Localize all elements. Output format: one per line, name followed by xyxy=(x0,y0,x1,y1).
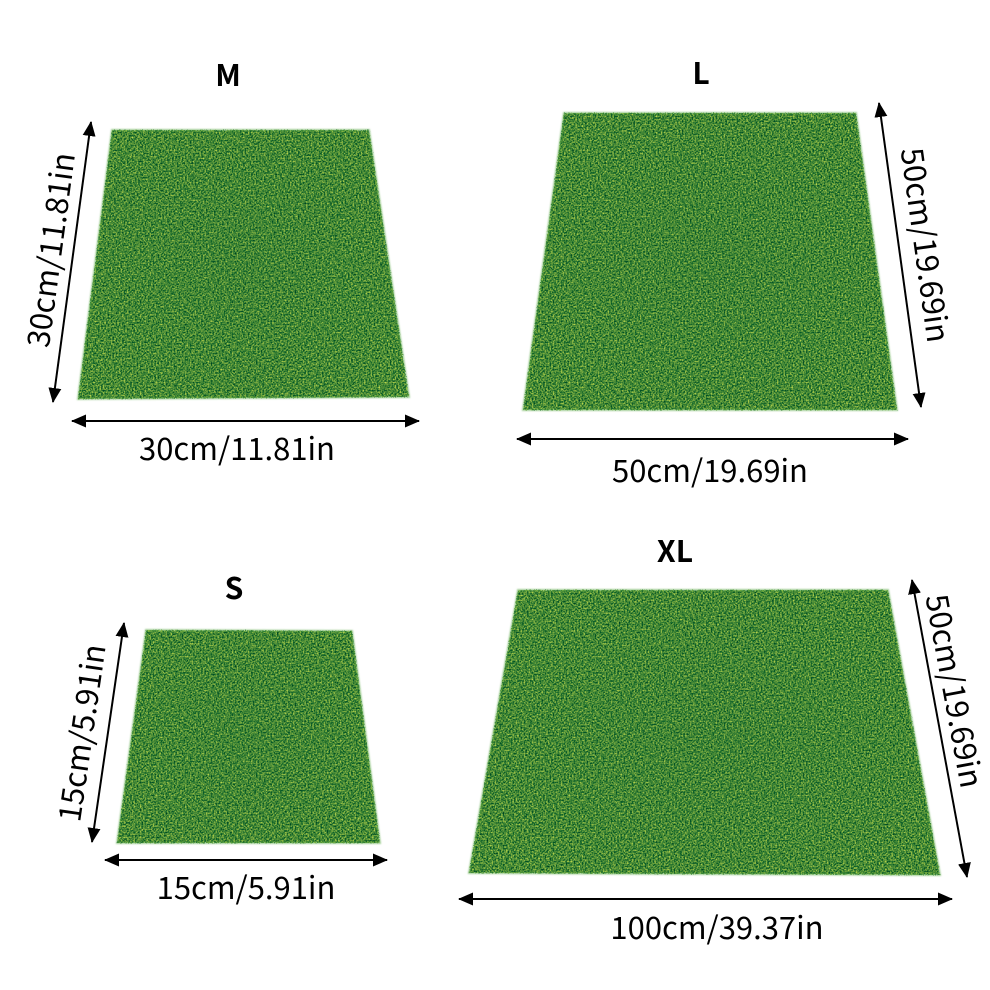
label: M width: 30cm/11.81in xyxy=(139,424,335,469)
panel: size M xyxy=(13,51,419,469)
arrow: S width xyxy=(105,859,387,861)
label: S width: 15cm/5.91in xyxy=(157,863,335,908)
panel: size XL xyxy=(459,527,990,948)
arrow: L width xyxy=(517,438,908,440)
arrow: M height xyxy=(53,122,91,402)
label: XL width: 100cm/39.37in xyxy=(610,903,824,948)
heading: L: L xyxy=(692,49,710,93)
grass mat M xyxy=(78,130,409,399)
heading: M: M xyxy=(215,51,241,95)
label: L width: 50cm/19.69in xyxy=(612,446,808,491)
arrow: M width xyxy=(72,420,419,422)
panel: size L xyxy=(517,49,963,491)
grass mat XL xyxy=(469,590,940,875)
grass mat S xyxy=(117,630,380,843)
arrow: XL width xyxy=(459,898,952,900)
heading: S: S xyxy=(225,564,243,608)
label: L height: 50cm/19.69in xyxy=(892,145,963,345)
label: M height: 30cm/11.81in xyxy=(13,150,84,350)
grass mat L xyxy=(523,113,897,410)
label: S height: 15cm/5.91in xyxy=(44,641,115,824)
panel: size S xyxy=(44,564,387,908)
arrow: XL height xyxy=(912,580,967,877)
arrow: S height xyxy=(92,623,124,842)
heading: XL: XL xyxy=(657,527,693,571)
arrow: L height xyxy=(879,103,921,407)
